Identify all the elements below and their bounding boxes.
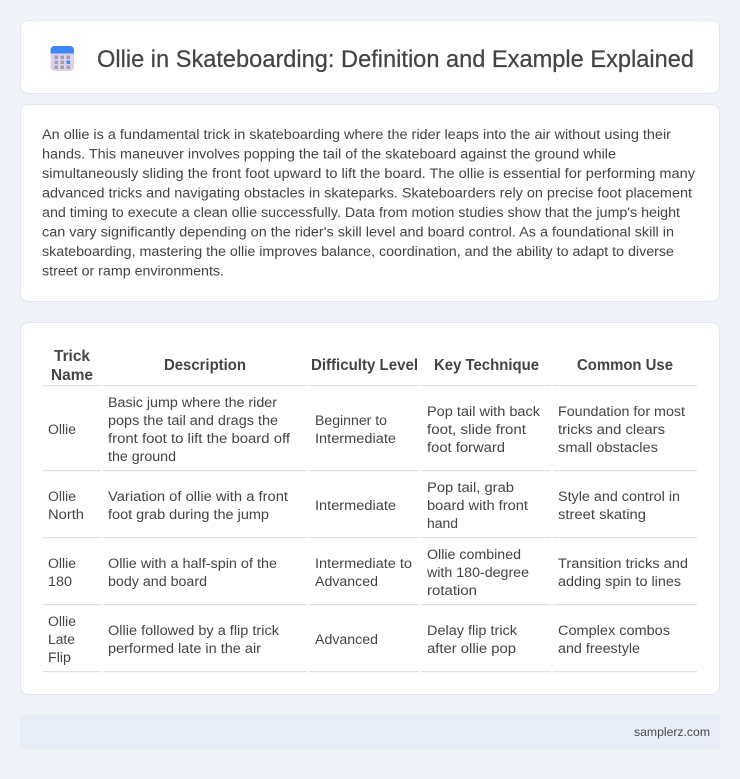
table row: Ollie 180: Ollie with a half-spin of the: [108, 556, 277, 572]
table row: Ollie: small obstacles: [558, 440, 658, 456]
table row: Ollie: [48, 395, 685, 465]
text block: intro paragraph: hands. This maneuver involves popping the tail of the skateboard against the ground while: [42, 146, 616, 162]
table row: Ollie 180: with 180-degree: [426, 565, 529, 581]
text block: intro paragraph: skateboarding, mastering the ollie improves balance, coordination, and the ability to adapt to diverse: [42, 244, 674, 260]
table row: Ollie 180: Ollie: [48, 556, 76, 572]
table row: Ollie Late Flip: after ollie pop: [427, 641, 516, 657]
table row: Ollie North: Intermediate: [315, 498, 396, 514]
table header: Name: [51, 367, 93, 384]
table row: Ollie Late Flip: Late: [48, 632, 75, 648]
table row: Ollie 180: 180: [48, 574, 72, 590]
table header: Common Use: [577, 357, 673, 374]
table row: Ollie 180: body and board: [108, 574, 207, 590]
table row: Ollie North: North: [48, 507, 84, 523]
table header: Key Technique: [434, 357, 539, 374]
table row: Ollie Late Flip: Complex combos: [558, 623, 670, 639]
table row: Ollie North: Pop tail, grab: [427, 480, 514, 496]
table row: Ollie North: board with front: [427, 498, 528, 514]
table row: Ollie: the ground: [108, 449, 176, 465]
table row: Ollie 180: Transition tricks and: [558, 556, 688, 572]
table row: Ollie North: Style and control in: [558, 489, 680, 505]
table row: Ollie North: street skating: [558, 507, 646, 523]
table row: Ollie North: [48, 480, 680, 532]
table row: Ollie Late Flip: and freestyle: [558, 641, 640, 657]
table row: Ollie: pops the tail and drags the: [108, 413, 278, 429]
table header: [51, 348, 673, 384]
panel: table card: [20, 322, 720, 694]
table row: Ollie Late Flip: Ollie: [48, 614, 76, 630]
table row: Ollie: foot, slide front: [427, 422, 526, 438]
table row: Ollie Late Flip: [48, 614, 670, 666]
text block: intro paragraph: An ollie is a fundamental trick in skateboarding where the rider leaps into the air without using their: [42, 127, 671, 143]
table header: Description: [164, 357, 246, 374]
table row: Ollie 180: rotation: [427, 583, 477, 599]
text block: intro paragraph: can vary significantly depending on the rider's skill level and board control. As a foundational skill in: [42, 224, 674, 240]
panel: title card: [20, 20, 720, 94]
table header: Difficulty Level: [311, 357, 418, 374]
text block: intro paragraph: advanced tricks and navigating obstacles in skateparks. Skateboarders rely on precise foot placement: [42, 186, 692, 202]
table row: Ollie: front foot to lift the board off: [108, 431, 290, 447]
title: Ollie in Skateboarding: Definition and Example Explained: [97, 46, 694, 73]
table row: Ollie Late Flip: Ollie followed by a flip trick: [108, 623, 280, 639]
table header: Trick: [54, 348, 90, 365]
table row: Ollie North: Variation of ollie with a front: [108, 489, 288, 505]
table row: Ollie: Basic jump where the rider: [108, 395, 277, 411]
table row: Ollie: Intermediate: [315, 431, 396, 447]
footer credit: samplerz.com: [634, 725, 710, 739]
text block: intro paragraph: street or ramp environments.: [42, 264, 224, 280]
table row: Ollie 180: Advanced: [315, 574, 378, 590]
text block: intro paragraph: and timing to execute a clean ollie successfully. Data from motion studies show that the jump's height: [42, 205, 680, 221]
table row: Ollie 180: adding spin to lines: [558, 574, 681, 590]
table row: Ollie Late Flip: Flip: [48, 650, 71, 666]
table row: Ollie 180: Intermediate to: [315, 556, 412, 572]
table row: Ollie 180: Ollie combined: [427, 547, 521, 563]
table row: Ollie: Foundation for most: [558, 404, 685, 420]
table row: Ollie: Ollie: [48, 422, 76, 438]
table row: Ollie North: Ollie: [48, 489, 76, 505]
table row: Ollie: Beginner to: [315, 413, 387, 429]
table row: Ollie Late Flip: performed late in the air: [108, 641, 261, 657]
icon: calendar: [50, 46, 74, 71]
table row: Ollie Late Flip: Advanced: [315, 632, 378, 648]
table row: Ollie: Pop tail with back: [427, 404, 541, 420]
table row: Ollie: tricks and clears: [558, 422, 665, 438]
table row: Ollie 180: [48, 547, 688, 599]
panel: intro text: [20, 104, 720, 302]
table row: Ollie North: hand: [427, 516, 458, 532]
footer bar: [20, 715, 720, 749]
table row: Ollie Late Flip: Delay flip trick: [427, 623, 518, 639]
text block: intro paragraph: [42, 127, 696, 280]
text block: intro paragraph: simultaneously sliding the front foot upward to lift the board. The ollie is essential for performing many: [42, 166, 696, 182]
table row: Ollie: foot forward: [427, 440, 505, 456]
table row: Ollie North: foot grab during the jump: [108, 507, 269, 523]
